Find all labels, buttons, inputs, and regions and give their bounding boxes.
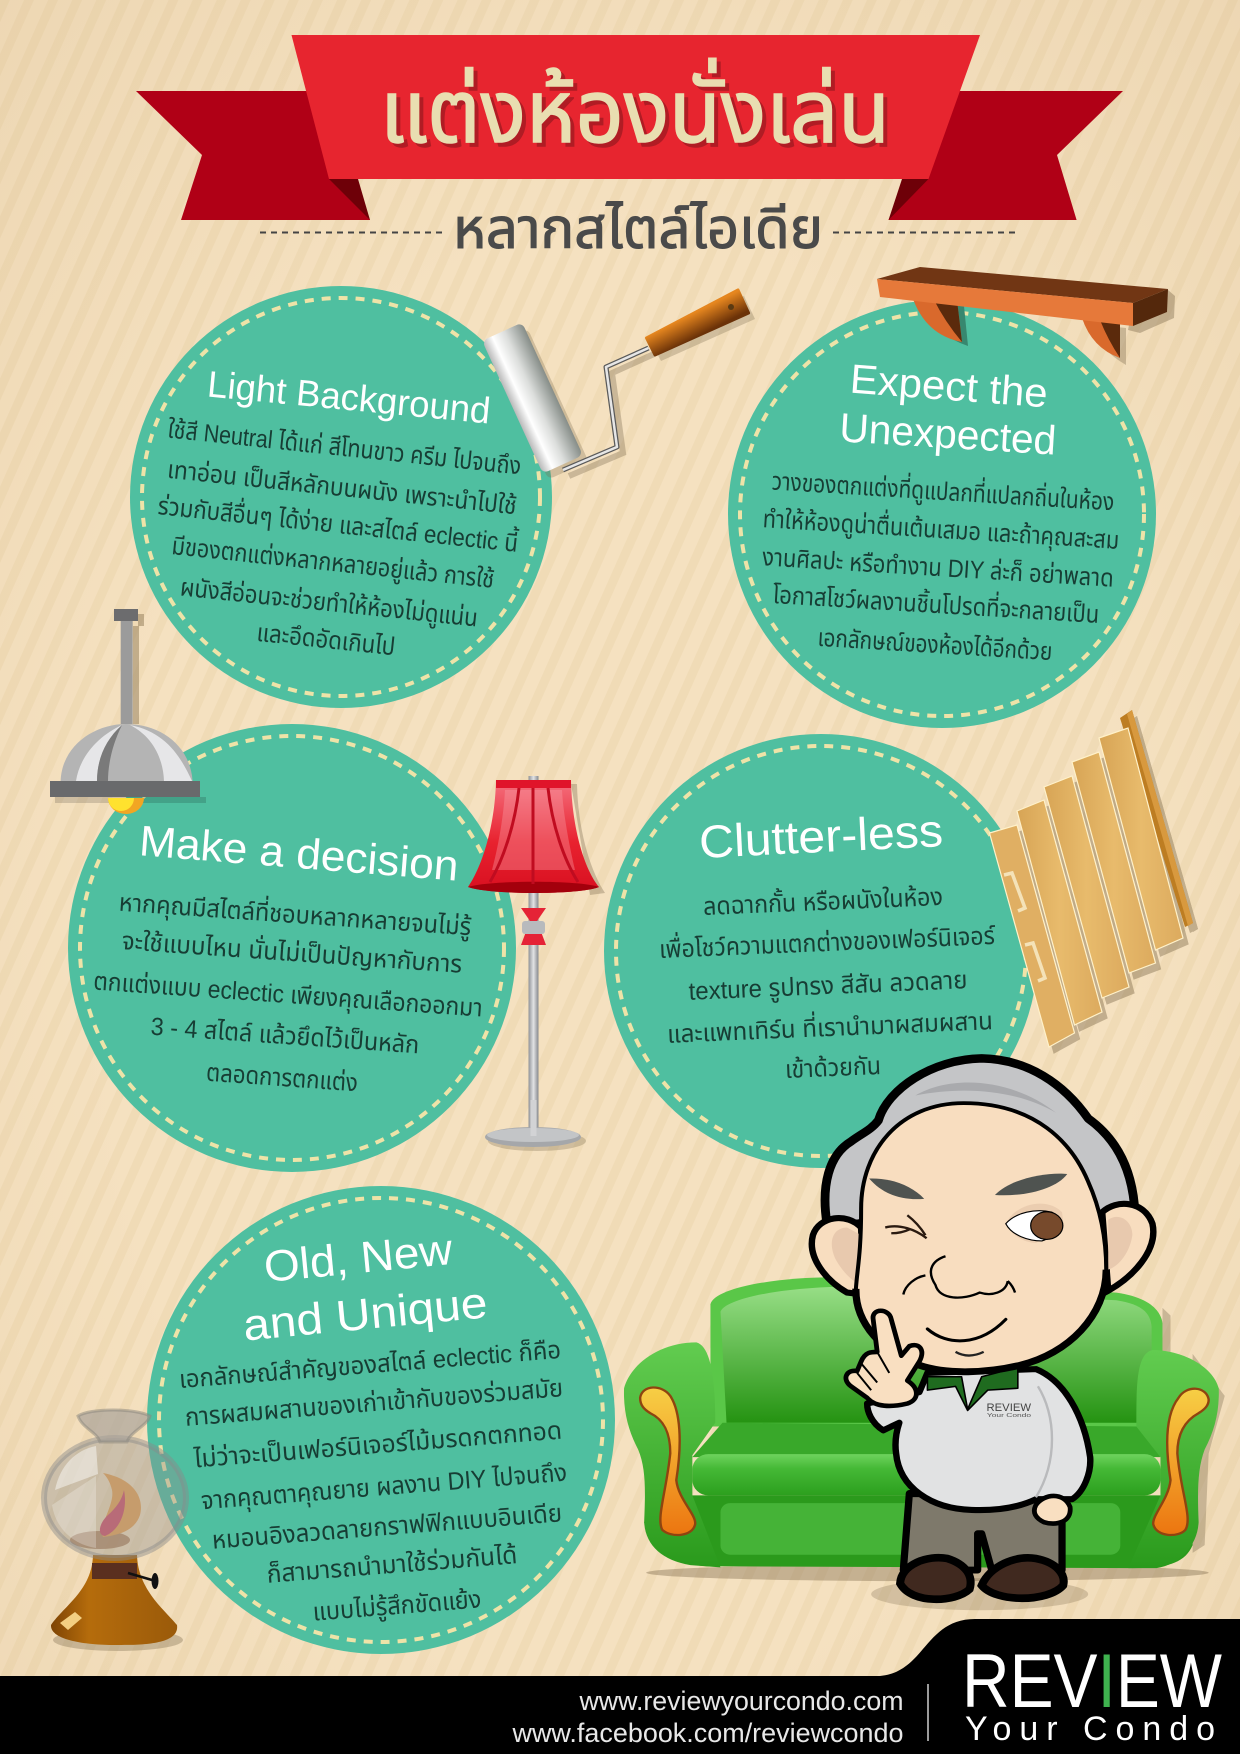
pants <box>903 1493 1062 1570</box>
icon: red floor lamp <box>468 776 605 1151</box>
heading: Clutter-less: Clutter-less <box>698 804 944 868</box>
collar <box>927 1367 1018 1410</box>
footer logo: REVIEW <box>962 1639 1222 1724</box>
title ribbon <box>136 35 1123 220</box>
heading: Expect the Unexpected: Unexpected <box>838 404 1058 464</box>
illustration: winking old man mascot <box>812 1058 1153 1610</box>
body text: Old, New and Unique: หมอนอิงลวดลายกราฟฟิกแบบอินเดีย <box>211 1499 563 1555</box>
heading: Expect the Unexpected <box>838 356 1058 464</box>
heading: Make a decision: Make a decision <box>138 817 460 891</box>
heading: Old, New and Unique: Old, New <box>262 1225 455 1292</box>
footer website links <box>512 1686 904 1748</box>
body text: Make a decision: จะใช้แบบไหน นั่นไม่เป็นปัญหากับการ <box>121 925 463 979</box>
sofa armrest ornaments <box>640 1388 695 1535</box>
panel: Light Background <box>130 286 552 708</box>
body text: Expect the Unexpected: โอกาสโชว์ผลงานชิ้นโปรดที่จะกลายเป็น <box>772 577 1100 629</box>
body text: Light Background <box>157 416 522 661</box>
sofa base <box>644 1495 1193 1568</box>
body text: Clutter-less: ลดฉากกั้น หรือผนังในห้อง <box>702 880 943 921</box>
heading: Light Background: Light Background <box>206 363 492 432</box>
body text: Make a decision: หากคุณมีสไตล์ที่ชอบหลากหลายจนไม่รู้ <box>118 885 473 942</box>
right hand <box>1034 1496 1070 1524</box>
body text: Light Background: ร่วมกับสีอื่นๆ ได้ง่าย และสไตล์ eclectic นี้ <box>157 488 520 558</box>
body text: Expect the Unexpected: ทำให้ห้องดูน่าตื่นเต้นเสมอ และถ้าคุณสะสม <box>762 501 1120 556</box>
shirt logo: Your Condo <box>987 1413 1031 1419</box>
sofa back <box>710 1277 1162 1427</box>
winking eye <box>885 1215 927 1238</box>
body text: Light Background: ผนังสีอ่อนจะช่วยทำให้ห้องไม่ดูแน่น <box>179 573 479 634</box>
body text: Expect the Unexpected <box>761 464 1120 666</box>
body text: Clutter-less: และแพทเทิร์น ที่เรานำมาผสมผสาน <box>666 1003 993 1049</box>
body text: Expect the Unexpected: งานศิลปะ หรือทำงาน DIY ล่ะก็ อย่าพลาด <box>761 543 1115 593</box>
nose and cheek lines <box>903 1256 1015 1298</box>
eyebrows <box>869 1178 924 1199</box>
body text: Clutter-less: texture รูปทรง สีสัน ลวดลาย <box>688 966 968 1007</box>
body text: Make a decision: ตกแต่งแบบ eclectic เพียงคุณเลือกออกมา <box>92 967 484 1024</box>
icon: folding screen <box>990 710 1193 1047</box>
panel: Old, New and Unique <box>147 1186 615 1654</box>
illustration: green sofa <box>624 1277 1225 1581</box>
body text: Old, New and Unique: แบบไม่รู้สึกขัดแย้ง <box>312 1585 482 1628</box>
body text: Old, New and Unique: ไม่ว่าจะเป็นเฟอร์นิเจอร์ไม้มรดกตกทอด <box>192 1417 563 1474</box>
ears <box>812 1218 863 1294</box>
body text: Expect the Unexpected: วางของตกแต่งที่ดูแปลกที่แปลกถิ่นในห้อง <box>771 464 1115 517</box>
panel: Make a decision <box>68 724 516 1172</box>
panel: Clutter-less <box>604 734 1038 1168</box>
body text: Expect the Unexpected: เอกลักษณ์ของห้องได้อีกด้วย <box>817 624 1053 666</box>
shoes <box>900 1558 971 1599</box>
footer bar <box>0 1619 1240 1754</box>
body text: Old, New and Unique: การผสมผสานของเก่าเข้ากับของร่วมสมัย <box>184 1374 564 1432</box>
heading: Old, New and Unique <box>241 1225 489 1351</box>
shirt logo: REVIEW <box>986 1401 1032 1414</box>
body text: Light Background: และอึดอัดเกินไป <box>255 619 397 661</box>
pointing hand <box>846 1311 922 1406</box>
footer website links: www.reviewyourcondo.com <box>579 1686 904 1716</box>
icon: pendant lamp <box>50 609 206 814</box>
body text: Clutter-less <box>658 880 997 1084</box>
heading: Old, New and Unique: and Unique <box>241 1278 489 1351</box>
shirt <box>867 1369 1090 1510</box>
mouth <box>927 1319 1006 1341</box>
icon: paint roller <box>482 290 755 480</box>
body text: Make a decision: 3 - 4 สไตล์ แล้วยึดไว้เป็นหลัก <box>150 1013 420 1059</box>
body text: Clutter-less: เพื่อโชว์ความแตกต่างของเฟอร์นิเจอร์ <box>658 918 997 964</box>
title text: แต่งห้องนั่งเล่น <box>380 58 890 161</box>
hair <box>825 1058 1134 1224</box>
subtitle with dashed rules: หลากสไตล์ไอเดีย <box>453 197 823 260</box>
body text: Old, New and Unique <box>178 1336 568 1628</box>
body text: Light Background: เทาอ่อน เป็นสีหลักบนผนัง เพราะนำไปใช้ <box>166 456 518 520</box>
footer website links: www.facebook.com/reviewcondo <box>512 1718 904 1748</box>
open eye <box>1006 1204 1064 1243</box>
panel: Expect the Unexpected <box>728 300 1156 728</box>
body text: Light Background: มีของตกแต่งหลากหลายอยู่แล้ว การใช้ <box>170 532 496 595</box>
body text: Light Background: ใช้สี Neutral ได้แก่ สีโทนขาว ครีม ไปจนถึง <box>167 416 522 480</box>
icon: wall shelf <box>877 267 1175 365</box>
footer logo: Your Condo <box>965 1710 1215 1748</box>
icon: oil lamp <box>44 1410 186 1651</box>
body text: Make a decision: ตลอดการตกแต่ง <box>205 1059 359 1097</box>
body text: Clutter-less: เข้าด้วยกัน <box>784 1052 882 1084</box>
body text: Old, New and Unique: เอกลักษณ์สำคัญของสไตล์ eclectic ก็คือ <box>178 1336 562 1394</box>
body text: Make a decision <box>92 885 484 1097</box>
body text: Old, New and Unique: ก็สามารถนำมาใช้ร่วมกันได้ <box>266 1541 518 1589</box>
face <box>856 1103 1106 1372</box>
sofa arms <box>624 1342 720 1567</box>
heading: Expect the Unexpected: Expect the <box>848 356 1049 416</box>
body text: Old, New and Unique: จากคุณตาคุณยาย ผลงาน DIY ไปจนถึง <box>200 1459 568 1516</box>
